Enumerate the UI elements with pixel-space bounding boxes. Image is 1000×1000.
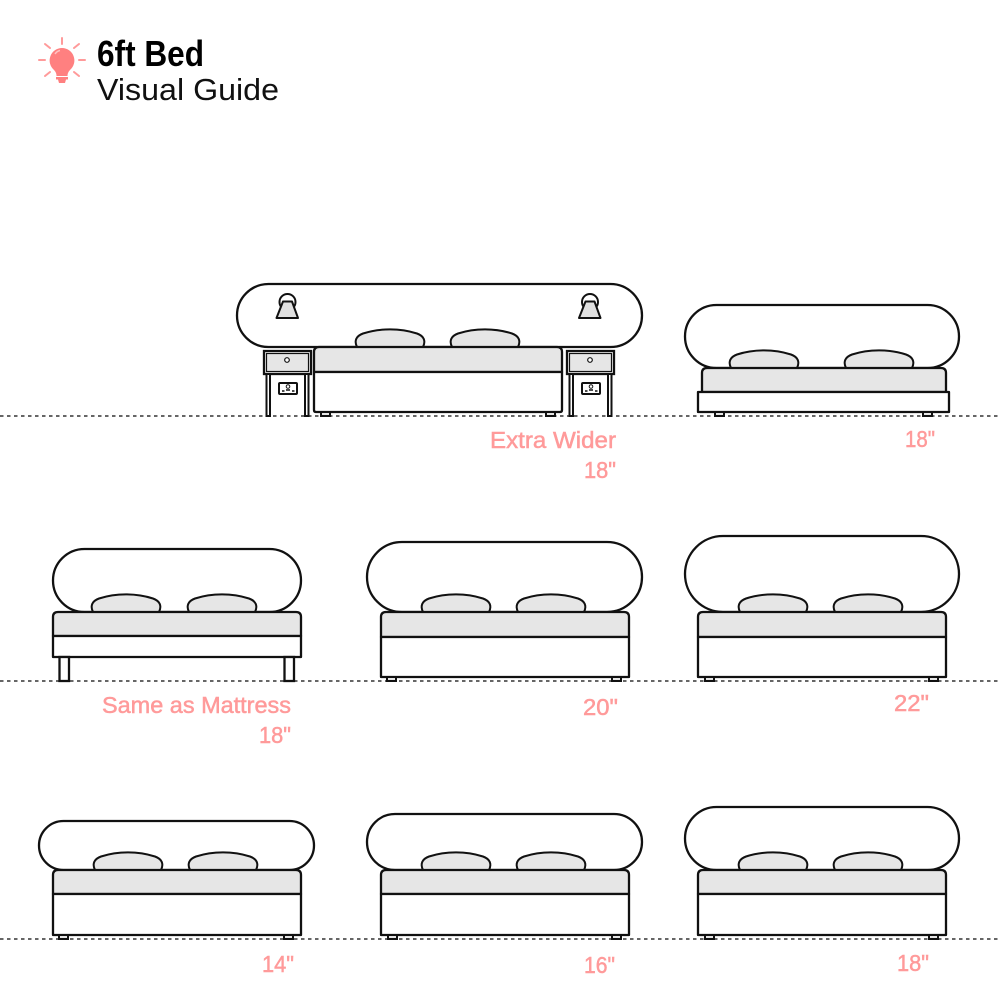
bed: extra wider headboard with nightstands: [237, 284, 642, 416]
label: 14: 14": [262, 951, 294, 977]
pillow right: [517, 852, 585, 870]
pillow right: [834, 594, 902, 612]
mattress: [381, 870, 629, 894]
mattress: [381, 612, 629, 637]
bed: 22 inch: [685, 536, 959, 681]
label: 18: 18": [897, 950, 929, 976]
legs: [60, 657, 294, 681]
pillow right: [189, 852, 257, 870]
mattress: [702, 368, 946, 392]
bed: legs, same as mattress: [53, 549, 301, 681]
bed base: [381, 637, 629, 677]
feet: [705, 935, 938, 939]
pillow right: [451, 329, 519, 347]
label: 22: 22": [894, 690, 929, 716]
icon: right wall lamp: [579, 294, 600, 318]
bed: 16 inch: [367, 814, 642, 939]
pillow right: [517, 594, 585, 612]
pillow left: [422, 852, 490, 870]
pillow left: [356, 329, 424, 347]
floor line: row 2: [0, 680, 1000, 682]
bed: 20 inch: [367, 542, 642, 681]
icon: left wall lamp: [276, 294, 298, 318]
socket: [279, 383, 297, 394]
feet: [387, 677, 621, 681]
pillow left: [730, 350, 798, 368]
mattress: [698, 870, 946, 894]
right nightstand: [567, 351, 614, 416]
mattress: [698, 612, 946, 637]
bed base: [314, 372, 562, 412]
label: platform 18: 18": [905, 426, 935, 452]
icon: light bulb: [39, 38, 85, 83]
feet: [705, 677, 938, 681]
pillow left: [92, 594, 160, 612]
feet: [388, 935, 621, 939]
pillow left: [739, 594, 807, 612]
pillow right: [845, 350, 913, 368]
bed base: [698, 392, 949, 412]
floor line: row 1: [0, 415, 1000, 417]
title: Visual Guide: [97, 72, 279, 107]
pillow right: [188, 594, 256, 612]
pillow right: [834, 852, 902, 870]
title: 6ft Bed: [97, 33, 204, 74]
bed: wider platform base: [685, 305, 959, 416]
floor line: row 3: [0, 938, 1000, 940]
label: Extra Wider 18: [490, 427, 616, 483]
left nightstand: [264, 351, 311, 416]
label: 20: 20": [583, 694, 618, 720]
label: Same as Mattress 18: 18": [259, 722, 291, 748]
bed base: [381, 894, 629, 935]
pillow left: [739, 852, 807, 870]
bed base: [698, 894, 946, 935]
label: Same as Mattress 18: Same as Mattress: [102, 692, 291, 718]
title: [97, 33, 279, 107]
feet: [59, 935, 293, 939]
bed base: [698, 637, 946, 677]
mattress: [314, 347, 562, 372]
label: Extra Wider 18: Extra Wider: [490, 427, 616, 453]
label: 16: 16": [584, 952, 615, 978]
feet: [715, 412, 932, 416]
mattress: [53, 870, 301, 894]
bed base: [53, 636, 301, 657]
feet: [321, 412, 555, 416]
bed base: [53, 894, 301, 935]
pillow left: [94, 852, 162, 870]
bed: 18 inch: [685, 807, 959, 939]
label: Same as Mattress 18: [102, 692, 291, 748]
pillow left: [422, 594, 490, 612]
mattress: [53, 612, 301, 636]
socket: [582, 383, 600, 394]
bed: 14 inch: [39, 821, 314, 939]
label: Extra Wider 18: 18": [584, 457, 616, 483]
